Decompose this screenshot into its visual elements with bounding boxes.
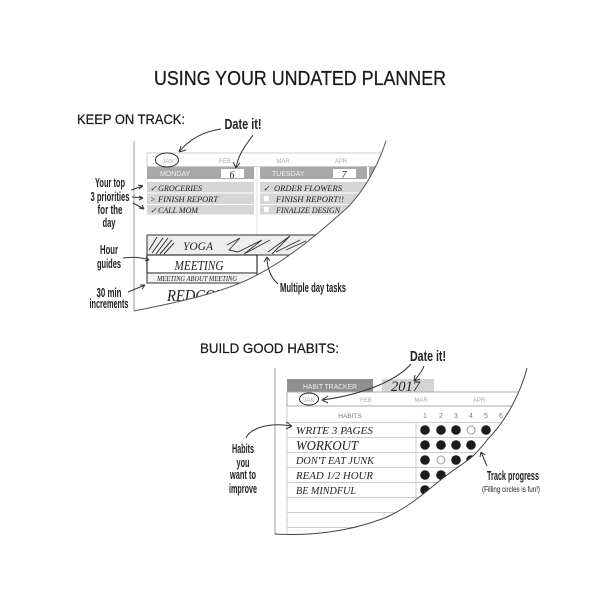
task: meeting: MEETING <box>174 259 224 274</box>
habit names <box>295 426 375 497</box>
arrow: date to year <box>414 366 424 381</box>
arrow: track progress <box>480 452 487 466</box>
heading: keep on track: KEEP ON TRACK: <box>77 111 185 127</box>
label: hour guides: guides <box>97 257 121 271</box>
day column: monday: 6 <box>230 170 234 181</box>
panel: planner page <box>134 141 389 311</box>
label: top priorities: day <box>102 216 116 230</box>
month band <box>287 392 532 406</box>
month band: MAR <box>414 398 428 404</box>
month band <box>147 153 387 166</box>
task: meeting <box>147 255 257 274</box>
header: habit tracker: HABIT TRACKER <box>303 384 357 391</box>
day column: monday: GROCERIES <box>158 184 202 193</box>
label: hour guides <box>97 243 121 271</box>
arrow: habits <box>246 422 292 438</box>
habits column header: HABITS <box>338 413 362 420</box>
month band: APR <box>473 398 486 404</box>
habits column header: 3 <box>454 413 458 420</box>
day column: tuesday: TUESDAY <box>272 171 305 178</box>
label: track progress: Track progress <box>487 469 539 483</box>
label: habits you want to improve: want to <box>229 468 256 482</box>
day column: monday: MONDAY <box>160 171 191 178</box>
heading: build good habits: BUILD GOOD HABITS: <box>200 340 339 356</box>
page left edge <box>133 141 135 311</box>
progress circles <box>420 425 491 495</box>
day column: monday: FINISH REPORT <box>157 195 219 204</box>
label: habits you want to improve: Habits <box>232 442 254 456</box>
label: multiple day tasks: Multiple day tasks <box>280 281 346 295</box>
day column: monday: > <box>150 195 155 204</box>
day column: monday: CALL MOM <box>158 206 199 215</box>
table grid <box>286 406 502 534</box>
arrow: date to jan <box>179 129 221 152</box>
task: meeting about meeting <box>147 273 257 283</box>
page outline <box>275 368 527 534</box>
label: hour guides: Hour <box>100 243 118 257</box>
label: 30 min increments: 30 min <box>96 286 122 300</box>
day column: tuesday: 7 <box>342 170 348 181</box>
label: 30 min increments <box>90 286 129 311</box>
circle: jan <box>300 393 318 405</box>
day column: tuesday <box>260 167 375 214</box>
arrow: date to jan <box>322 364 411 403</box>
day column: monday: ✓ <box>150 206 157 215</box>
label: date it: Date it! <box>224 116 262 133</box>
day column: monday: ✓ <box>150 184 157 193</box>
month band: JAN <box>303 398 315 404</box>
habits column header: 5 <box>484 413 488 420</box>
habits column header: 6 <box>499 413 503 420</box>
panel: habit tracker page <box>275 368 532 540</box>
habit names: WRITE 3 PAGES <box>296 426 373 437</box>
label: top priorities: for the <box>98 203 123 217</box>
habits column header: 1 <box>423 413 427 420</box>
label: track progress <box>482 469 540 494</box>
habit names: WORKOUT <box>296 439 359 454</box>
page outline <box>134 141 386 311</box>
circle: jan <box>156 153 178 167</box>
arrow: hour guides <box>123 257 149 261</box>
habit names: DON'T EAT JUNK <box>295 456 375 467</box>
day column: monday <box>147 167 254 215</box>
header: habit tracker <box>287 379 373 392</box>
day column: tuesday: ✓ <box>263 184 270 193</box>
label: habits you want to improve: you <box>236 456 250 470</box>
arrow: date to number <box>233 135 253 168</box>
label: top priorities: 3 priorities <box>90 190 130 204</box>
label: top priorities: Your top <box>95 176 125 190</box>
header: year <box>382 379 434 392</box>
habit names: READ 1/2 HOUR <box>295 471 374 482</box>
arrow: multiple day tasks <box>264 257 278 284</box>
month band: FEB <box>219 159 231 165</box>
day column: tuesday: FINISH REPORT!! <box>275 195 344 204</box>
label: date it: Date it! <box>410 348 446 365</box>
arrow: 30 min <box>128 285 145 292</box>
day column: tuesday: ORDER FLOWERS <box>274 184 342 193</box>
label: track progress: (Filling circles is fun!) <box>482 485 540 494</box>
day column: tuesday: FINALIZE DESIGN <box>275 206 341 215</box>
header: year: 2017 <box>391 379 421 395</box>
habit names: BE MINDFUL <box>296 486 356 497</box>
habits column header: 4 <box>469 413 473 420</box>
month band: APR <box>335 159 348 165</box>
title: USING YOUR UNDATED PLANNER <box>154 68 446 90</box>
task: yoga <box>146 234 316 256</box>
habits column header: 2 <box>439 413 443 420</box>
task: yoga: YOGA <box>183 239 214 253</box>
task: meeting about meeting: MEETING ABOUT MEETING <box>156 275 237 283</box>
arrows: priorities <box>131 185 144 209</box>
label: top priorities <box>90 176 130 230</box>
task: redcode: REDCODE <box>166 286 236 305</box>
label: 30 min increments: increments <box>90 297 129 311</box>
month band: MAR <box>276 159 290 165</box>
label: habits you want to improve <box>229 442 257 496</box>
page left edge <box>274 368 276 534</box>
label: habits you want to improve: improve <box>229 482 257 496</box>
habits column header <box>338 413 503 418</box>
month band: FEB <box>360 398 372 404</box>
month band: JAN <box>162 159 174 165</box>
